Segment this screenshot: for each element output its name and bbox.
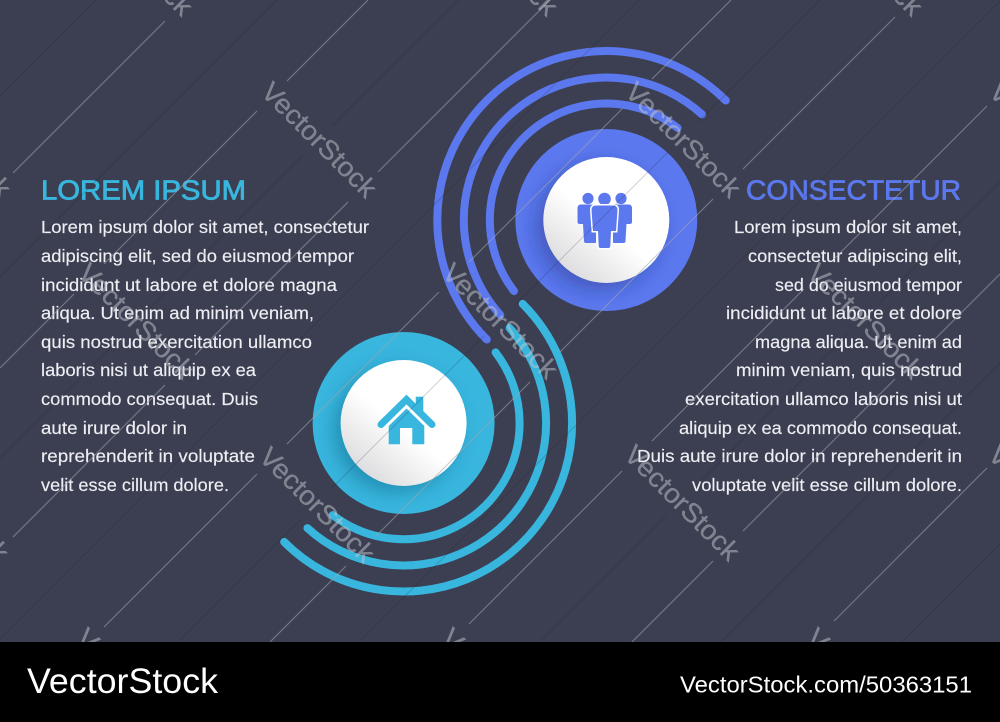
watermarks: VectorStock: [72, 257, 200, 385]
text block: left: adipiscing elit, sed do eiusmod tempor: [41, 246, 354, 266]
icon: house: [381, 397, 432, 444]
teal concentric arcs: [284, 304, 572, 592]
blue circle with people icon: [515, 129, 697, 311]
watermarks: VectorStock: [618, 439, 746, 567]
footer logo: VectorStock: [27, 662, 219, 701]
text block: right: exercitation ullamco laboris nisi ut: [685, 389, 962, 409]
text block: right: sed do eiusmod tempor: [775, 275, 962, 295]
text block: left: laboris nisi ut aliquip ex ea: [41, 360, 256, 380]
watermarks: VectorStock: [255, 76, 383, 204]
footer image id: VectorStock.com/50363151: [680, 672, 972, 698]
watermarks: VectorStock: [619, 76, 747, 204]
text block: right: voluptate velit esse cillum dolore.: [692, 475, 962, 495]
text block: right: [637, 217, 962, 495]
text block: left: aliqua. Ut enim ad minim veniam,: [41, 303, 314, 323]
text block: left: aute irure dolor in: [41, 418, 187, 438]
heading: left: LOREM IPSUM: [41, 174, 246, 206]
text block: left: reprehenderit in voluptate: [41, 446, 255, 466]
footer bar: [0, 642, 1000, 722]
text block: right: magna aliqua. Ut enim ad: [755, 332, 962, 352]
blue concentric arcs: [437, 51, 726, 339]
text block: left: incididunt ut labore et dolore magna: [41, 275, 337, 295]
text block: left: quis nostrud exercitation ullamco: [41, 332, 312, 352]
text block: right: aliquip ex ea commodo consequat.: [679, 418, 962, 438]
text block: left: Lorem ipsum dolor sit amet, consectetur: [41, 217, 369, 237]
watermarks: VectorStock: [253, 441, 381, 569]
text block: right: incididunt ut labore et dolore: [726, 303, 962, 323]
heading: right: CONSECTETUR: [746, 174, 961, 206]
teal circle with house icon: [313, 332, 495, 514]
watermarks: VectorStock: [801, 257, 929, 385]
text block: right: consectetur adipiscing elit,: [748, 246, 962, 266]
text block: right: minim veniam, quis nostrud: [736, 360, 962, 380]
text block: left: [41, 217, 369, 495]
text block: left: velit esse cillum dolore.: [41, 475, 229, 495]
watermarks: VectorStock: [436, 257, 564, 385]
text block: right: Duis aute irure dolor in reprehenderit in: [637, 446, 962, 466]
text block: left: commodo consequat. Duis: [41, 389, 258, 409]
text block: right: Lorem ipsum dolor sit amet,: [734, 217, 962, 237]
icon: people: [578, 193, 632, 248]
